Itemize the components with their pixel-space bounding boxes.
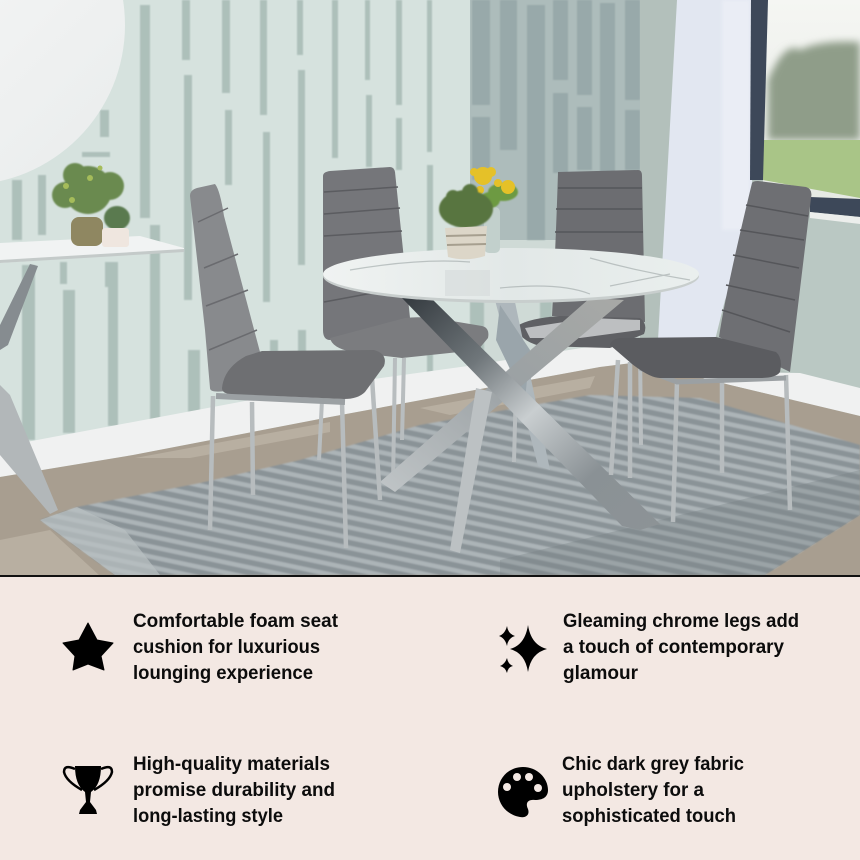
feature text: materials: High-quality materials bbox=[133, 754, 330, 775]
chair: front right bbox=[610, 181, 811, 522]
feature text: foam seat: cushion for luxurious bbox=[133, 637, 320, 658]
feature text: upholstery: sophisticated touch bbox=[562, 806, 736, 827]
icon: star bbox=[63, 623, 113, 670]
mirror bbox=[0, 0, 125, 185]
feature text: upholstery bbox=[562, 754, 744, 827]
feature text: chrome legs bbox=[563, 611, 799, 684]
table top bbox=[323, 248, 699, 303]
panel: features bbox=[0, 577, 860, 860]
feature text: chrome legs: Gleaming chrome legs add bbox=[563, 611, 799, 632]
feature text: upholstery: Chic dark grey fabric bbox=[562, 754, 744, 775]
wall panels bbox=[0, 0, 860, 480]
feature text: materials: promise durability and bbox=[133, 780, 335, 801]
window bbox=[750, 0, 860, 224]
floor bbox=[0, 362, 860, 576]
icon: trophy bbox=[64, 766, 112, 814]
feature text: foam seat bbox=[133, 611, 339, 684]
icon: sparkles bbox=[499, 625, 547, 673]
plant on console bbox=[52, 163, 130, 247]
feature text: chrome legs: a touch of contemporary bbox=[563, 637, 784, 658]
vase with flowers bbox=[439, 167, 518, 259]
rug bbox=[40, 395, 860, 575]
table legs bbox=[380, 297, 660, 553]
chair: front left bbox=[190, 184, 385, 548]
feature text: chrome legs: glamour bbox=[563, 663, 639, 684]
feature text: foam seat: Comfortable foam seat bbox=[133, 611, 339, 632]
feature text: foam seat: lounging experience bbox=[133, 663, 313, 684]
feature text: materials: long-lasting style bbox=[133, 806, 283, 827]
panel: room photo bbox=[0, 0, 860, 577]
feature text: upholstery: upholstery for a bbox=[562, 780, 704, 801]
baseboard bbox=[0, 345, 860, 477]
chair: back left bbox=[319, 167, 488, 485]
feature text: materials bbox=[133, 754, 335, 827]
icon: palette bbox=[498, 767, 548, 817]
photo bottom rule bbox=[0, 575, 860, 577]
console table bbox=[0, 236, 184, 514]
right wall bbox=[640, 0, 860, 400]
chair: back right bbox=[514, 170, 645, 462]
curtain bbox=[658, 0, 752, 340]
